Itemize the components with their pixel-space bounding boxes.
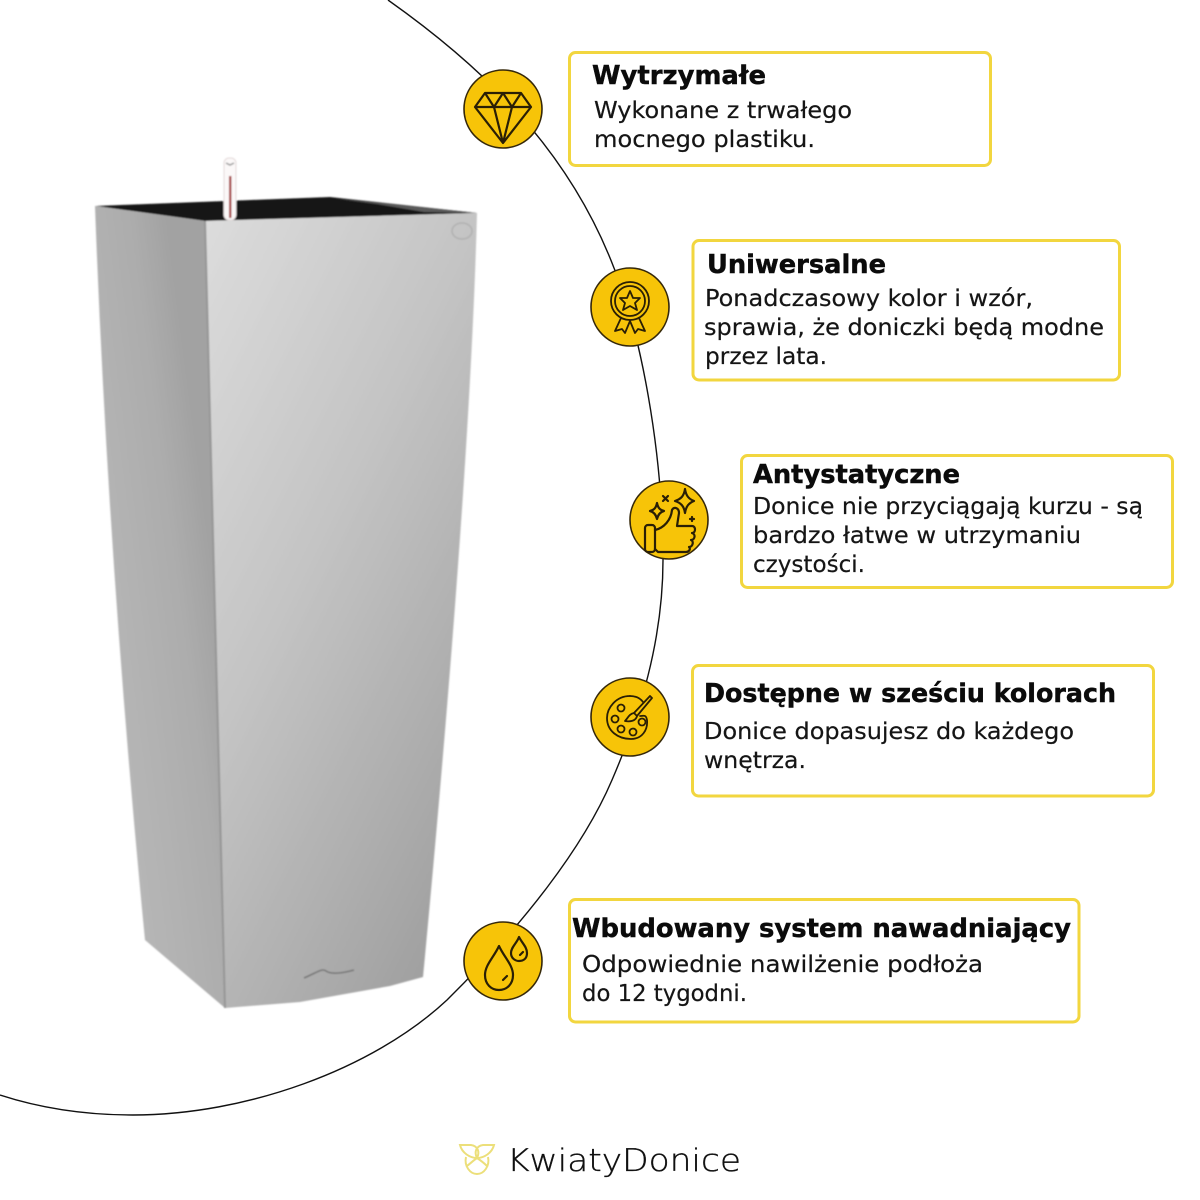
feature 2: universal: [591, 240, 1120, 380]
icon: award medal: [591, 268, 669, 346]
panel: Dostępne w sześciu kolorach: wnętrza.: [704, 746, 806, 774]
panel: Antystatyczne: Donice nie przyciągają kurzu - są: [753, 492, 1143, 520]
panel: Wbudowany system nawadniający: [570, 900, 1079, 1022]
icon: butterfly flower: [460, 1145, 494, 1174]
feature 4: six colours: [591, 666, 1154, 796]
product: silver planter: [95, 158, 477, 1008]
planter inner wall: [332, 198, 477, 213]
icon: diamond: [464, 70, 542, 148]
icon: thumbs up with sparkles: [630, 481, 708, 559]
panel: Wytrzymałe: Wykonane z trwałego: [594, 96, 852, 124]
panel: Wytrzymałe: Wytrzymałe: [592, 61, 766, 91]
panel: Antystatyczne: Antystatyczne: [753, 460, 960, 490]
water level indicator: [224, 158, 236, 220]
panel: Uniwersalne: przez lata.: [705, 342, 827, 370]
panel: Uniwersalne: sprawia, że doniczki będą modne: [704, 313, 1104, 341]
panel: Dostępne w sześciu kolorach: Donice dopasujesz do każdego: [704, 717, 1074, 745]
panel: Dostępne w sześciu kolorach: Dostępne w sześciu kolorach: [704, 679, 1116, 709]
icon: painter palette: [591, 678, 669, 756]
planter signature: [304, 970, 354, 978]
icon: water drops: [464, 922, 542, 1000]
planter left face: [95, 206, 225, 1008]
panel: Uniwersalne: [693, 240, 1120, 380]
panel: Antystatyczne: czystości.: [753, 550, 865, 578]
panel: Wbudowany system nawadniający: Wbudowany system nawadniający: [572, 914, 1071, 944]
planter corner edge: [205, 221, 225, 1008]
planter logo mark: [452, 223, 472, 239]
panel: Uniwersalne: Uniwersalne: [707, 250, 886, 280]
logo: KwiatyDonice: [460, 1143, 741, 1179]
planter front face: [205, 213, 477, 1008]
panel: Antystatyczne: [742, 456, 1172, 588]
panel: Wytrzymałe: [570, 52, 990, 166]
panel: Wytrzymałe: mocnego plastiku.: [594, 125, 815, 153]
feature 3: antistatic: [630, 456, 1172, 588]
feature 1: durable: [464, 52, 990, 166]
panel: Wbudowany system nawadniający: do 12 tygodni.: [582, 979, 747, 1007]
feature 5: irrigation: [464, 900, 1079, 1022]
panel: Dostępne w sześciu kolorach: [692, 666, 1154, 796]
panel: Wbudowany system nawadniający: Odpowiednie nawilżenie podłoża: [582, 950, 983, 978]
panel: Uniwersalne: Ponadczasowy kolor i wzór,: [705, 284, 1033, 312]
panel: Antystatyczne: bardzo łatwe w utrzymaniu: [753, 521, 1081, 549]
wordmark: KwiatyDonice: [507, 1143, 741, 1179]
decorative arc connecting icons: [0, 0, 663, 1115]
planter opening: [95, 197, 477, 221]
